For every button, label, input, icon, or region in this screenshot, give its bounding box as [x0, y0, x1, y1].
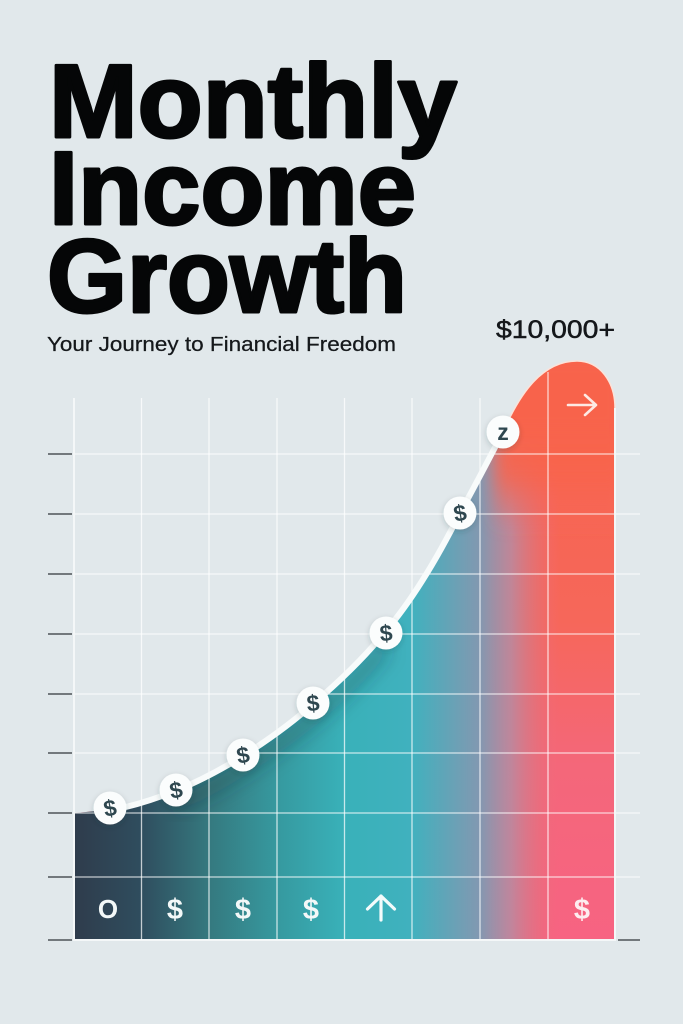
title — [47, 44, 457, 335]
bottom row labels: $ — [235, 894, 251, 926]
marker 3: $ — [234, 741, 252, 769]
title: Monthly — [49, 44, 457, 160]
chart — [48, 355, 640, 945]
marker 1 — [94, 792, 126, 824]
title: Income — [49, 131, 416, 247]
title: Growth — [47, 219, 407, 335]
marker 2 — [160, 774, 192, 806]
bottom row labels: O — [98, 894, 118, 924]
baseline and right edge — [74, 398, 615, 940]
marker 5: $ — [378, 619, 394, 647]
axis ticks — [48, 454, 640, 940]
marker 6: $ — [451, 499, 469, 527]
bottom row labels: $ — [574, 894, 590, 926]
bottom row labels — [98, 894, 590, 926]
area fill — [74, 355, 625, 945]
marker 4: $ — [305, 689, 321, 717]
grid — [74, 372, 640, 940]
bottom row labels: $ — [167, 894, 183, 926]
peak value label: $10,000+ — [496, 316, 615, 344]
icon: up arrow — [368, 896, 394, 920]
icon: right arrow — [568, 395, 596, 415]
marker 3 — [226, 738, 260, 772]
marker 5 — [370, 616, 402, 650]
marker 7: z — [497, 419, 509, 445]
growth curve line — [110, 432, 503, 810]
bottom row labels: $ — [303, 894, 319, 926]
marker 7 — [486, 416, 520, 448]
marker 6 — [444, 496, 476, 530]
marker 4 — [296, 686, 330, 720]
subtitle: Your Journey to Financial Freedom — [47, 333, 396, 356]
curve top outline — [503, 361, 615, 432]
marker 2: $ — [167, 776, 185, 804]
marker 1: $ — [101, 794, 119, 822]
